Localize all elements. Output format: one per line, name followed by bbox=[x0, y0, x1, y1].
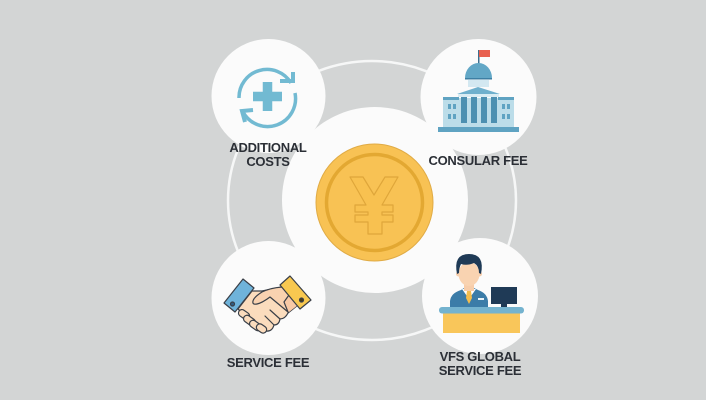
connecting ring bbox=[228, 61, 516, 340]
icon: government building bbox=[438, 50, 519, 132]
white circle bbox=[422, 238, 538, 354]
panel: additional costs bbox=[212, 39, 326, 169]
panel: service fee bbox=[212, 241, 326, 370]
label: CONSULAR FEE bbox=[429, 153, 528, 168]
central white circle bbox=[282, 107, 468, 293]
label: VFS GLOBAL bbox=[440, 349, 521, 364]
label: SERVICE FEE bbox=[227, 355, 310, 370]
label: ADDITIONAL bbox=[229, 140, 307, 155]
white circle bbox=[420, 39, 536, 155]
fingers bbox=[237, 308, 268, 335]
white circle bbox=[212, 39, 326, 153]
icon: handshake bbox=[224, 276, 311, 335]
panel: VFS Global service fee bbox=[422, 238, 538, 378]
icon: circular arrows with plus bbox=[239, 69, 296, 127]
panel: consular fee bbox=[420, 39, 536, 168]
icon: agent at desk bbox=[439, 254, 524, 333]
label: SERVICE FEE bbox=[439, 363, 522, 378]
white circle bbox=[212, 241, 326, 355]
icon: yen coin bbox=[316, 144, 433, 261]
label: COSTS bbox=[246, 154, 290, 169]
